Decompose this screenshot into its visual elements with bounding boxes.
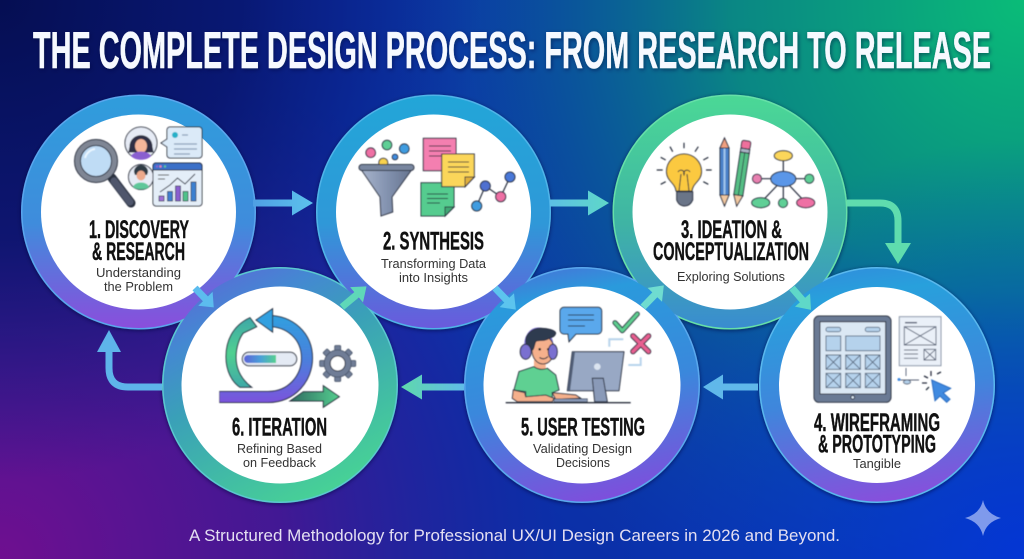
- footer tagline: A Structured Methodology for Professional UX/UI Design Careers in 2026 and Beyond.: [189, 527, 840, 545]
- subtitle: discovery: [96, 266, 181, 294]
- subtitle: user testing: Decisions: [556, 456, 610, 470]
- panel: step 2 synthesis: [336, 114, 531, 310]
- ring: step 5: [466, 268, 698, 502]
- icon: magnifier and research: [74, 127, 202, 206]
- icon: bulb pencils and mind map: [657, 138, 815, 208]
- heading: wireframing: 4. WIREFRAMING: [814, 409, 940, 437]
- subtitle: iteration: [237, 442, 322, 470]
- subtitle: iteration: Refining Based: [237, 442, 322, 456]
- arrow: step 6 to step 1: [97, 330, 162, 387]
- ring: step 4: [760, 268, 994, 502]
- arrow: step 6 diagonal to step 2: [336, 279, 373, 315]
- panel: step 5 user testing: [484, 286, 680, 484]
- heading: wireframing: & PROTOTYPING: [818, 430, 936, 458]
- arrow: step 2 to step 3: [550, 190, 609, 216]
- heading: ideation: 3. IDEATION &: [681, 216, 782, 244]
- subtitle: synthesis: [381, 257, 486, 285]
- heading: wireframing: [814, 409, 940, 458]
- heading: iteration: 6. ITERATION: [232, 414, 327, 442]
- panel: step 6 iteration: [182, 286, 378, 484]
- subtitle: synthesis: Transforming Data: [381, 257, 486, 271]
- heading: user testing: 5. USER TESTING: [521, 414, 645, 442]
- heading: discovery: [89, 216, 189, 266]
- icon: iteration loop, progress bar and gear: [219, 309, 356, 407]
- heading: discovery: & RESEARCH: [92, 238, 185, 266]
- panel: step 3 ideation: [632, 114, 828, 310]
- icon: funnel notes and graph: [359, 138, 515, 216]
- panel: step 4 wireframing: [779, 287, 975, 483]
- arrow: step 4 to step 5: [703, 374, 758, 400]
- subtitle: synthesis: into Insights: [399, 271, 468, 285]
- icon: tablet wireframes and cursor: [814, 316, 951, 402]
- subtitle: discovery: the Problem: [104, 280, 173, 294]
- ring: step 6: [164, 268, 396, 502]
- arrow: step 1 to step 2: [253, 190, 313, 216]
- ring: step 1: [22, 96, 254, 328]
- panel: step 1 discovery: [41, 114, 236, 310]
- arrow: step 5 to step 6: [401, 374, 464, 400]
- heading: ideation: CONCEPTUALIZATION: [653, 238, 809, 266]
- subtitle: ideation: Exploring Solutions: [677, 270, 785, 284]
- heading: synthesis: 2. SYNTHESIS: [383, 228, 484, 256]
- subtitle: discovery: Understanding: [96, 266, 181, 280]
- arrow: step 3 to step 4: [847, 203, 911, 264]
- arrow: step 3 diagonal to step 4: [784, 281, 819, 316]
- heading: discovery: 1. DISCOVERY: [89, 216, 189, 244]
- subtitle: user testing: Validating Design: [533, 442, 632, 456]
- arrow: step 2 diagonal to step 5: [488, 281, 523, 317]
- icon: sparkle: [965, 500, 1001, 536]
- arrow: step 5 diagonal to step 3: [636, 278, 671, 314]
- icon: user at computer: [506, 307, 648, 403]
- arrow: step 1 diagonal to step 6: [188, 281, 221, 314]
- ring: step 3: [614, 96, 846, 328]
- subtitle: wireframing: Tangible: [853, 457, 901, 471]
- heading: ideation: [653, 216, 809, 266]
- subtitle: iteration: on Feedback: [243, 456, 317, 470]
- subtitle: user testing: [533, 442, 632, 470]
- ring: step 2: [318, 96, 550, 328]
